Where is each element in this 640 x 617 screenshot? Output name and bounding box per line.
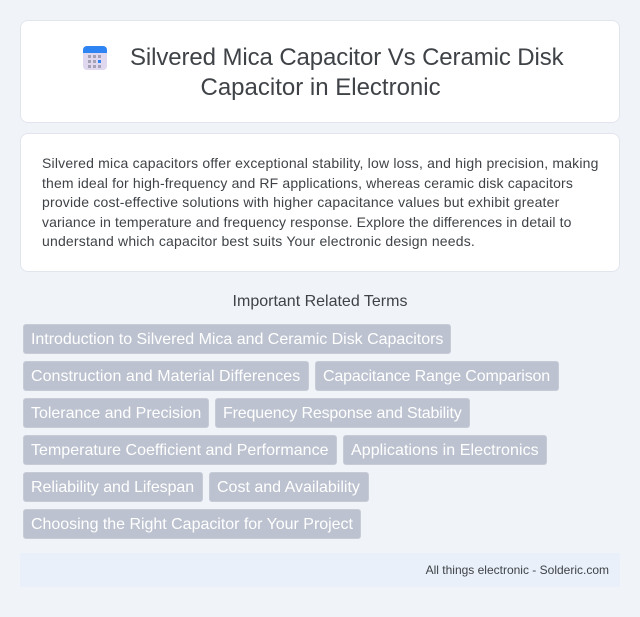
tag: cost (209, 472, 369, 502)
tag: construction (23, 361, 309, 391)
heading: related terms: Important Related Terms (233, 293, 407, 310)
tag: tolerance (23, 398, 209, 428)
summary text: them ideal for high-frequency and RF applications, whereas ceramic disk capacitors (42, 174, 573, 190)
summary text: understand which capacitor best suits Your electronic design needs. (42, 233, 475, 249)
tag list (23, 324, 559, 539)
footer (20, 553, 620, 587)
tag: reliability: Reliability and Lifespan (31, 479, 194, 496)
tag: temperature (23, 435, 337, 465)
tag: frequency: Frequency Response and Stability (223, 405, 462, 422)
tag: temperature: Temperature Coefficient and Performance (31, 442, 329, 459)
tag: introduction: Introduction to Silvered Mica and Ceramic Disk Capacitors (31, 331, 443, 348)
icon: calendar (83, 46, 107, 70)
tag: reliability (23, 472, 203, 502)
summary text: variance in temperature and frequency response. Explore the differences in detail to (42, 214, 572, 230)
tag: choosing: Choosing the Right Capacitor for Your Project (31, 516, 353, 533)
title (130, 44, 564, 101)
footer text: All things electronic - Solderic.com (426, 563, 609, 577)
tag: cost: Cost and Availability (217, 479, 360, 496)
tag: applications (343, 435, 547, 465)
panel: title card (20, 20, 620, 123)
tag: construction: Construction and Material Differences (31, 368, 300, 385)
summary text (42, 155, 599, 249)
tag: capacitance: Capacitance Range Comparison (323, 368, 550, 385)
tag: choosing (23, 509, 361, 539)
panel: summary card (20, 133, 620, 272)
tag: tolerance: Tolerance and Precision (31, 405, 201, 422)
tag: applications: Applications in Electronics (351, 442, 539, 459)
title: Silvered Mica Capacitor Vs Ceramic Disk (130, 44, 564, 71)
tag: capacitance (315, 361, 559, 391)
tag: introduction (23, 324, 451, 354)
title: Capacitor in Electronic (200, 74, 441, 101)
summary text: Silvered mica capacitors offer exceptional stability, low loss, and high precision, making (42, 155, 599, 171)
tag: frequency (215, 398, 470, 428)
summary text: provide cost-effective solutions with higher capacitance values but exhibit greater (42, 194, 559, 210)
